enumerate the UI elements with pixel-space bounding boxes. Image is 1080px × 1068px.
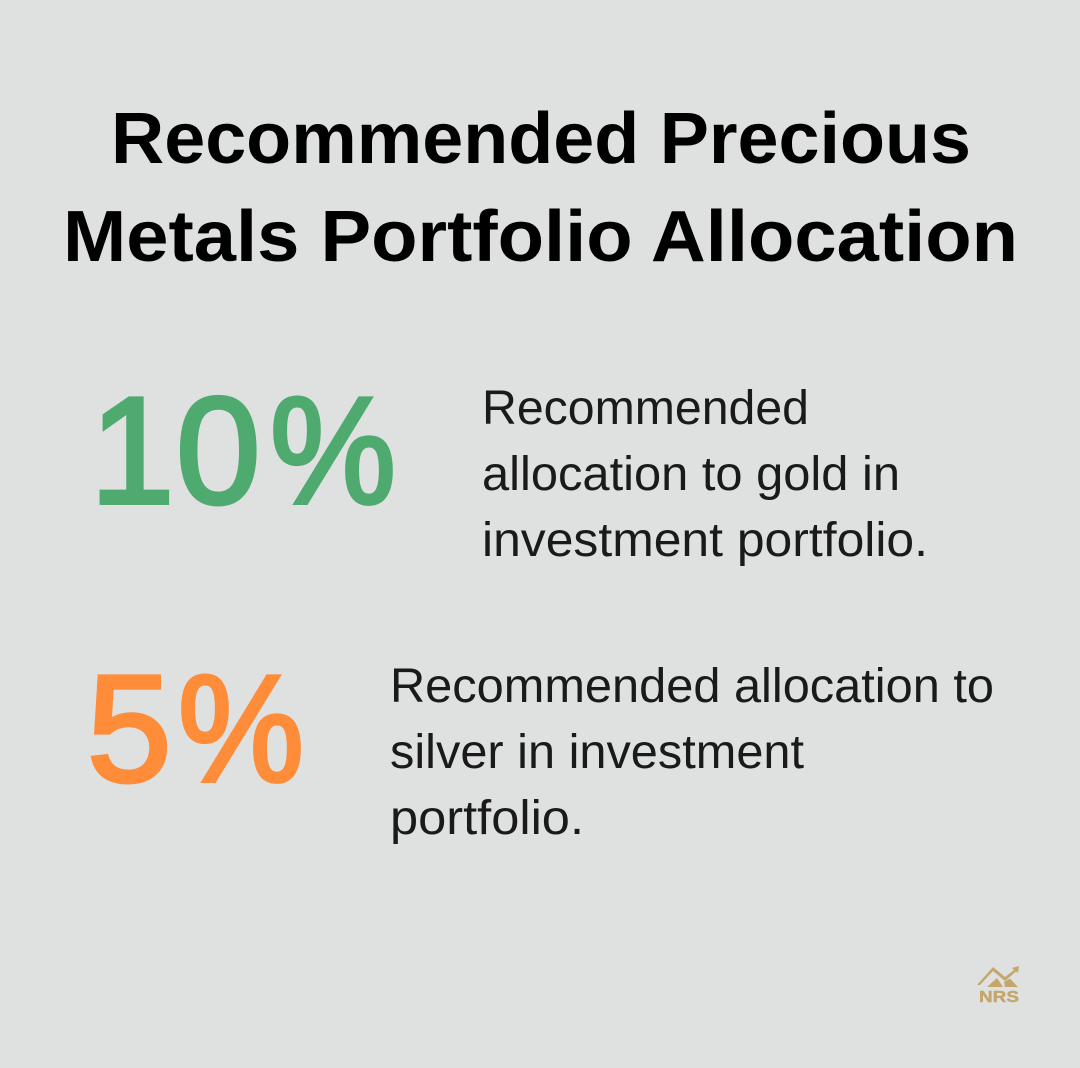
stat: 5% silver xyxy=(87,644,994,845)
title xyxy=(63,99,1018,277)
logo icon: roof and rising arrow xyxy=(977,966,1019,987)
title: Recommended Precious xyxy=(111,99,971,179)
stat value: 10%: 1 xyxy=(90,366,175,536)
title: Metals Portfolio Allocation xyxy=(63,197,1018,277)
stat description: gold xyxy=(482,382,928,567)
stat value: 5% xyxy=(87,644,304,814)
stat: 10% gold xyxy=(90,366,928,567)
stat value: 10%: 0 xyxy=(176,366,261,536)
stat description: gold: Recommended xyxy=(482,382,809,435)
stat value: 5%: % xyxy=(178,644,304,814)
stat description: silver: silver in investment xyxy=(390,726,804,779)
logo: NRS xyxy=(977,966,1019,1006)
stat value: 10% xyxy=(90,366,396,536)
logo wordmark: NRS xyxy=(979,989,1019,1006)
stat description: silver: Recommended allocation to xyxy=(390,660,994,713)
stat description: gold: investment portfolio. xyxy=(482,514,928,567)
stat value: 5%: 5 xyxy=(87,644,172,814)
stat description: silver: portfolio. xyxy=(390,792,584,845)
stat description: gold: allocation to gold in xyxy=(482,448,900,501)
stat value: 10%: % xyxy=(270,366,396,536)
stat description: silver xyxy=(390,660,994,845)
